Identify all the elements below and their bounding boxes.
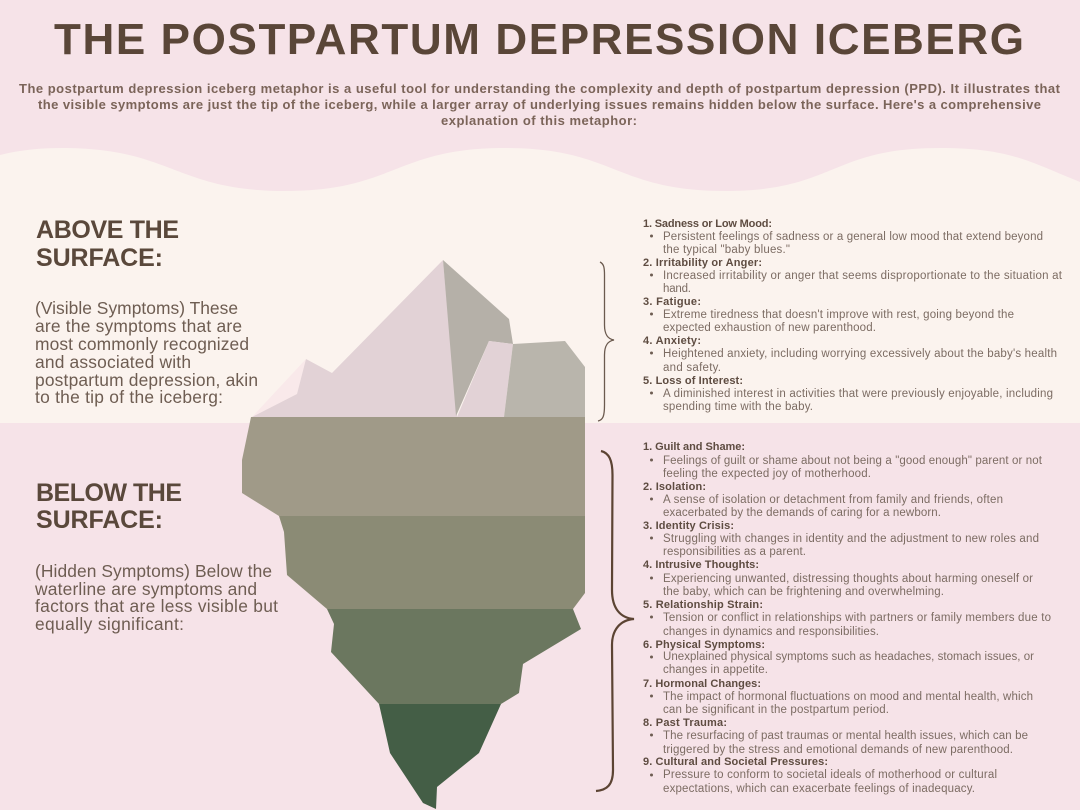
list: visible symptoms: 2. Irritability or Anger: (643, 257, 762, 269)
cream wave background: above the surface (0, 148, 1080, 423)
iceberg band 2 (279, 516, 585, 609)
list: hidden symptoms: The impact of hormonal fluctuations on mood and mental health, which (663, 691, 1033, 703)
text block: hidden symptoms: factors that are less visible but (35, 596, 278, 616)
list: hidden symptoms: 5. Relationship Strain: (643, 599, 763, 611)
list: visible symptoms: hand. (663, 283, 691, 295)
iceberg band 3 (327, 609, 581, 704)
text block: hidden symptoms: equally significant: (35, 614, 184, 634)
heading: below the surface (36, 479, 182, 534)
text block: visible symptoms: are the symptoms that are (35, 316, 242, 336)
intro text (19, 81, 1061, 128)
list: hidden symptoms: 3. Identity Crisis: (643, 520, 734, 532)
text block: visible symptoms: and associated with (35, 352, 191, 372)
list: hidden symptoms: 8. Past Trauma: (643, 717, 727, 729)
iceberg band 1 (242, 417, 585, 516)
list: hidden symptoms: Unexplained physical symptoms such as headaches, stomach issues, or (663, 651, 1034, 663)
text block: visible symptoms: to the tip of the iceberg: (35, 387, 223, 407)
text block: hidden symptoms: waterline are symptoms and (34, 579, 257, 599)
list: visible symptoms: spending time with the baby. (663, 401, 813, 413)
list: visible symptoms: 5. Loss of Interest: (643, 375, 743, 387)
title: THE POSTPARTUM DEPRESSION ICEBERG (54, 15, 1024, 64)
list: hidden symptoms: feeling the expected joy of motherhood. (663, 468, 871, 480)
list: hidden symptoms: 7. Hormonal Changes: (643, 678, 761, 690)
list: hidden symptoms: triggered by the stress and emotional demands of new parenthood. (663, 744, 1013, 756)
list: hidden symptoms: A sense of isolation or detachment from family and friends, often (663, 494, 1003, 506)
list: visible symptoms: A diminished interest in activities that were previously enjoyable, including (663, 388, 1053, 400)
list: hidden symptoms: 2. Isolation: (643, 481, 706, 493)
list: hidden symptoms: changes in appetite. (663, 664, 768, 676)
iceberg band 4 (379, 704, 501, 809)
list: hidden symptoms: expectations, which can exacerbate feelings of inadequacy. (663, 783, 975, 795)
list: hidden symptoms: 1. Guilt and Shame: (643, 441, 745, 453)
brace: below the surface (596, 451, 634, 791)
list: hidden symptoms (643, 441, 1051, 795)
list: hidden symptoms: 6. Physical Symptoms: (643, 639, 765, 651)
iceberg illustration (242, 260, 585, 809)
brace: above the surface (598, 262, 614, 421)
list: visible symptoms: Heightened anxiety, including worrying excessively about the baby's health (663, 348, 1057, 360)
heading: below the surface: BELOW THE (36, 479, 182, 507)
list: visible symptoms: the typical "baby blues." (663, 244, 790, 256)
list: visible symptoms: Extreme tiredness that doesn't improve with rest, going beyond the (663, 309, 1014, 321)
list: hidden symptoms: The resurfacing of past traumas or mental health issues, which can be (663, 730, 1028, 742)
heading: above the surface: SURFACE: (36, 244, 163, 272)
text block: visible symptoms (35, 298, 258, 407)
list: visible symptoms: and safety. (663, 362, 721, 374)
list: visible symptoms: 3. Fatigue: (643, 296, 701, 308)
list: hidden symptoms: responsibilities as a parent. (663, 546, 806, 558)
iceberg tip above the surface (252, 260, 585, 417)
intro text: the visible symptoms are just the tip of the iceberg, while a larger array of underlying issues remains hidden below the surface. Here's a comprehensive (38, 97, 1041, 112)
heading: below the surface: SURFACE: (36, 506, 163, 534)
list: visible symptoms: 1. Sadness or Low Mood: (643, 218, 772, 230)
list: hidden symptoms: exacerbated by the demands of caring for a newborn. (663, 507, 941, 519)
list: hidden symptoms: the baby, which can be frightening and overwhelming. (663, 586, 944, 598)
list: visible symptoms: 4. Anxiety: (643, 335, 701, 347)
text block: hidden symptoms: (Hidden Symptoms) Below the (35, 561, 272, 581)
text block: visible symptoms: postpartum depression, akin (35, 370, 258, 390)
list: hidden symptoms: can be significant in the postpartum period. (663, 704, 889, 716)
list: visible symptoms: Persistent feelings of sadness or a general low mood that extend beyond (663, 231, 1043, 243)
intro text: explanation of this metaphor: (441, 113, 637, 128)
list: hidden symptoms: Feelings of guilt or shame about not being a "good enough" parent or not (663, 455, 1043, 467)
list: hidden symptoms: Pressure to conform to societal ideals of motherhood or cultural (663, 769, 997, 781)
text block: hidden symptoms (34, 561, 278, 634)
list: visible symptoms: expected exhaustion of new parenthood. (663, 322, 876, 334)
list: hidden symptoms: Struggling with changes in identity and the adjustment to new roles and (663, 533, 1039, 545)
list: hidden symptoms: Tension or conflict in relationships with partners or family members due to (663, 612, 1051, 624)
text block: visible symptoms: most commonly recognized (35, 334, 249, 354)
heading: above the surface: ABOVE THE (36, 216, 179, 244)
heading: above the surface (36, 216, 179, 272)
text block: visible symptoms: (Visible Symptoms) These (35, 298, 238, 318)
list: visible symptoms (643, 218, 1063, 413)
list: hidden symptoms: 9. Cultural and Societal Pressures: (643, 756, 828, 768)
list: hidden symptoms: 4. Intrusive Thoughts: (643, 559, 759, 571)
list: hidden symptoms: Experiencing unwanted, distressing thoughts about harming oneself or (663, 573, 1033, 585)
intro text: The postpartum depression iceberg metaphor is a useful tool for understanding the complexity and depth of postpartum depression (PPD). It illustrates that (19, 81, 1061, 96)
list: hidden symptoms: changes in dynamics and responsibilities. (663, 626, 879, 638)
list: visible symptoms: Increased irritability or anger that seems disproportionate to the situation at (663, 270, 1063, 282)
